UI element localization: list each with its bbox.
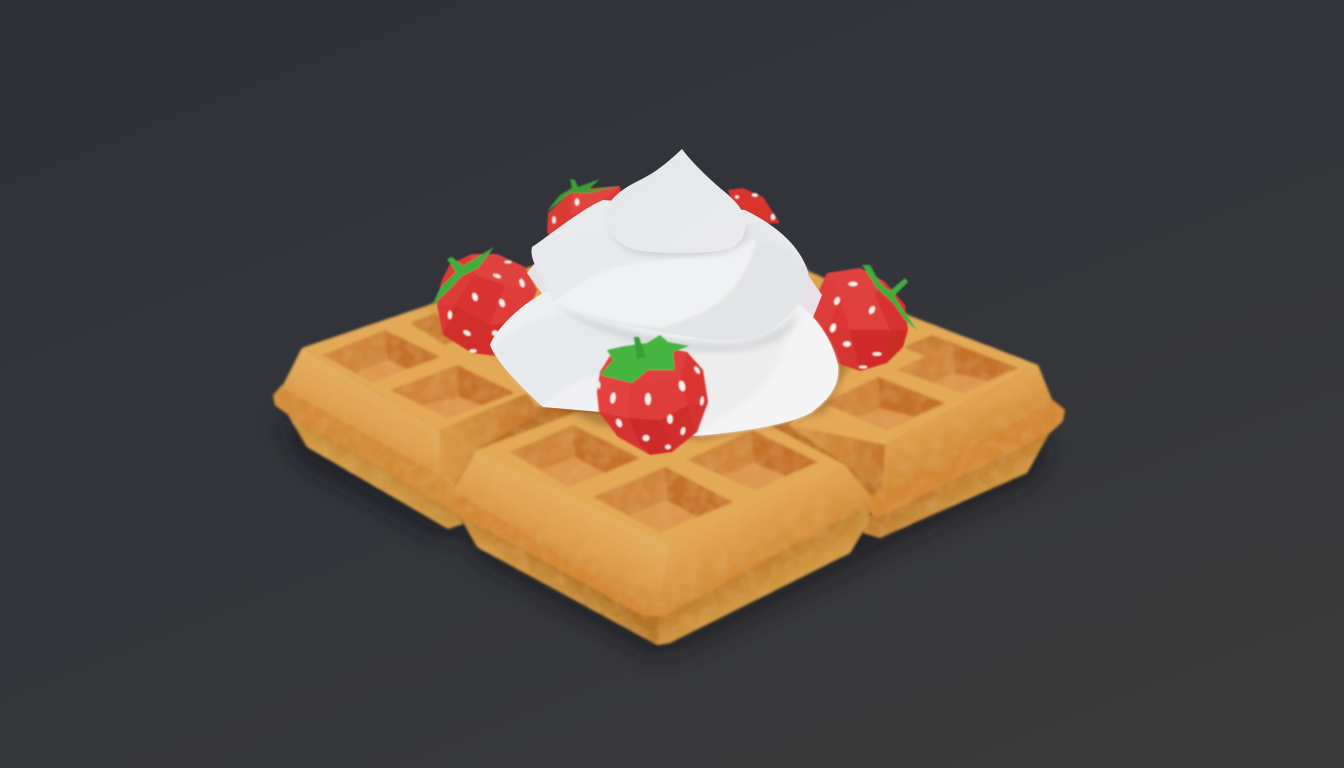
leaves [547,179,619,211]
leaves [862,265,917,330]
strawberry: back left [547,179,625,240]
strawberry: left [432,246,538,357]
centre block right wall [660,465,872,606]
centre block base right [657,500,870,645]
body [596,349,709,456]
centre block wells [510,425,818,532]
seeds [552,198,579,224]
body [813,267,909,372]
centre block rim [453,488,873,617]
right block top face [788,317,1038,445]
centre block top face [477,412,845,545]
centre block left wall [453,450,670,606]
seeds [448,261,526,353]
strawberry: front [596,334,709,456]
cream: dollop shadow [610,226,749,256]
waffle gap filler [440,405,885,560]
body [436,252,538,357]
right block left wall [788,425,885,492]
strawberry: right [813,264,917,372]
contact shadow under cream [530,350,850,440]
left block side wall [440,393,540,487]
centre block [453,412,873,645]
seeds [598,365,704,449]
waffle ground shadow [280,420,1055,655]
stem [634,337,646,359]
cream: side folds behind [797,275,822,320]
cream: shadow under middle tier [555,305,800,350]
left block top face [302,307,540,430]
right block base [863,432,1050,538]
left block base [288,415,463,529]
cream: top dollop [605,149,746,253]
cream: middle tier folds [552,240,755,328]
waffle back plate [423,265,913,425]
right block [788,317,1065,538]
right block wells [823,335,1018,430]
seeds [812,282,882,368]
strawberry: back right [728,188,780,225]
centre block base left [458,513,665,645]
cream: middle tier [531,200,808,340]
left block rim [273,385,480,514]
waffle [273,265,1065,645]
cream: bottom tier [490,292,838,436]
leaves [432,247,494,306]
left block wall [282,348,442,477]
seeds [735,193,775,220]
whipped cream [490,149,838,436]
leaves [600,335,689,383]
left block wells [322,313,515,418]
cream: bottom tier folds [493,316,710,407]
left block [273,307,540,529]
right block rim [864,400,1065,518]
right block wall [875,365,1053,498]
illustration: waffle with cream and strawberries [272,149,1067,654]
